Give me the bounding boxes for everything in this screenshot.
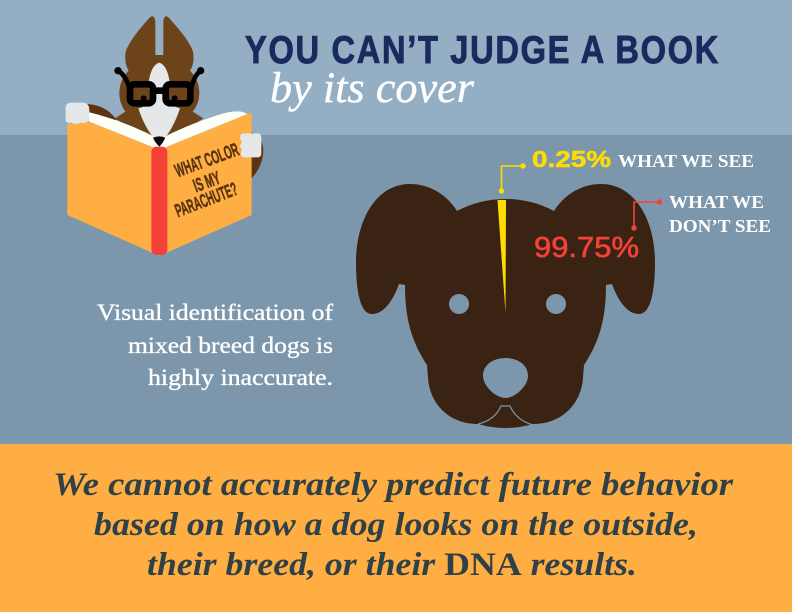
text block: visual identification: highly inaccurate. [148,365,333,390]
dog head and ears [115,16,203,143]
mouth line [478,406,533,425]
illustration: dog with glasses reading a book [66,16,263,255]
bottom statement: based on how a dog looks on the outside, [94,507,698,543]
label: what we see: WHAT WE SEE [618,151,754,171]
dog head chart [356,164,662,428]
label: what we don't see [669,192,771,236]
bottom orange panel [0,444,792,612]
text block: visual identification: Visual identification of [97,300,333,325]
book title: PARACHUTE? [172,178,240,221]
book spine [151,147,167,255]
middle background panel [0,135,792,444]
book cover [67,112,252,252]
bottom statement: We cannot accurately predict future behavior [53,467,734,503]
yellow wedge 0.25% [498,200,506,313]
dog head silhouette [356,184,655,428]
yellow callout line [499,164,525,193]
bottom statement [53,467,734,583]
white blaze [138,63,180,140]
book title: WHAT COLOR [172,138,242,181]
label: what we don't see: DON’T SEE [669,216,771,236]
top background band [0,0,792,135]
bottom statement: their breed, or their DNA results. [147,547,637,583]
dog eyes [141,95,178,101]
book title: IS MY [190,167,223,196]
label: what we don't see: WHAT WE [669,192,764,212]
value: 0.25%: 0.25% [532,146,611,172]
nose tip over the book [153,136,165,147]
subtitle: by its cover [270,65,474,112]
value: 99.75%: 99.75% [534,232,639,264]
text block: visual identification: mixed breed dogs is [128,333,333,358]
dog arms [83,104,263,180]
paws [66,103,261,157]
book pages [88,111,247,147]
glasses [116,69,203,103]
book title [172,138,242,221]
text block: visual identification [97,300,333,390]
red callout line [632,200,662,230]
